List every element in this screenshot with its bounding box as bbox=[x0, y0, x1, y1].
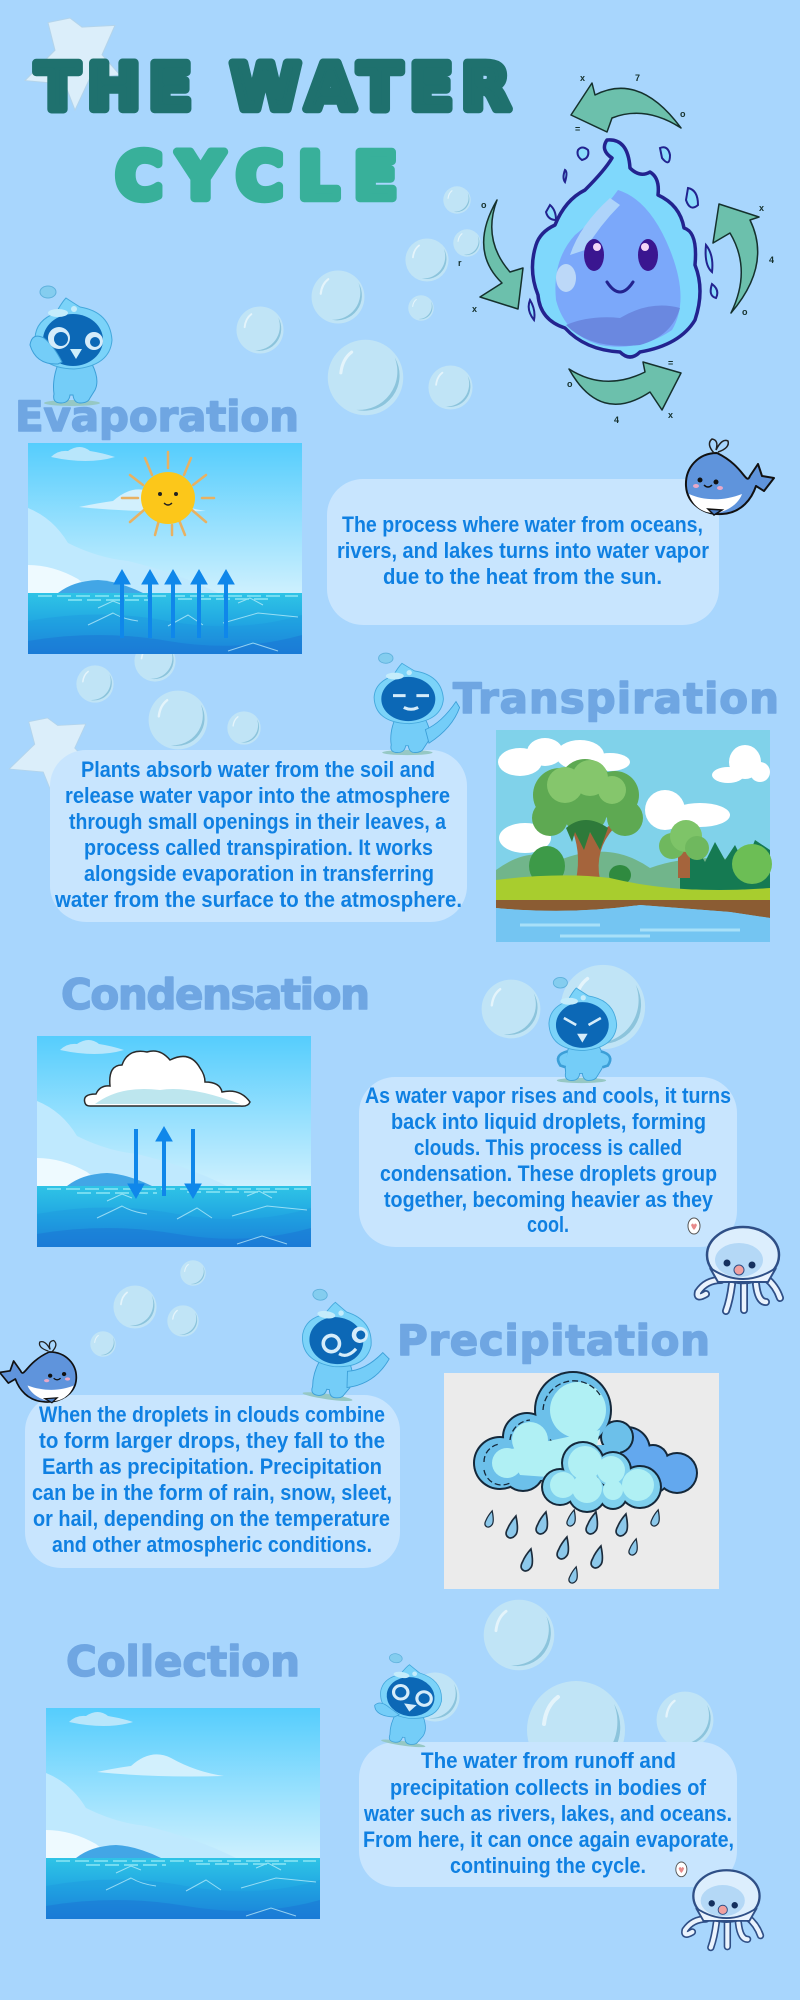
grass and bank bbox=[496, 875, 770, 905]
panel: collection text: From here, it can once again evaporate, bbox=[363, 1827, 734, 1852]
panel: evaporation text: due to the heat from the sun. bbox=[383, 564, 662, 589]
panel: transpiration text: through small openings in their leaves, a bbox=[69, 809, 447, 834]
panel: precipitation text: or hail, depending on the temperature bbox=[33, 1506, 390, 1531]
title line: the water: THE WATER bbox=[36, 51, 510, 124]
main cloud bbox=[473, 1371, 634, 1492]
smile bbox=[607, 282, 633, 292]
small marks around the drop: x bbox=[759, 203, 764, 213]
water drop body bbox=[529, 140, 717, 357]
panel: evaporation text: The process where water from oceans, bbox=[342, 512, 703, 537]
scene: evaporation bbox=[28, 443, 302, 654]
panel: transpiration text: water from the surface to the atmosphere. bbox=[54, 887, 462, 912]
panel: evaporation text bbox=[327, 479, 719, 625]
panel: evaporation text: rivers, and lakes turns into water vapor bbox=[337, 538, 709, 563]
small marks around the drop: x bbox=[668, 410, 673, 420]
evaporation arrows bbox=[114, 570, 234, 638]
heading: precipitation: Precipitation bbox=[397, 1316, 710, 1365]
panel: condensation text: clouds. This process is called bbox=[414, 1135, 682, 1160]
arrow: top bbox=[571, 83, 681, 132]
small marks around the drop: o bbox=[680, 109, 686, 119]
panel: condensation text: together, becoming heavier as they bbox=[384, 1187, 714, 1212]
star decoration: left bbox=[9, 718, 90, 793]
panel: transpiration text: process called transpiration. It works bbox=[84, 835, 433, 860]
raindrops bbox=[484, 1509, 662, 1584]
mascot: condensation bbox=[549, 977, 617, 1083]
panel: precipitation text bbox=[25, 1395, 400, 1568]
small marks around the drop: = bbox=[575, 124, 580, 134]
panel: collection text: water such as rivers, lakes, and oceans. bbox=[363, 1801, 732, 1826]
panel: transpiration text: release water vapor into the atmosphere bbox=[65, 783, 450, 808]
heading: evaporation: Evaporation bbox=[15, 392, 299, 441]
scene: tree landscape bbox=[496, 730, 772, 942]
title line: cycle: CYCLE bbox=[116, 140, 397, 213]
small marks around the drop: = bbox=[668, 358, 673, 368]
title bbox=[36, 51, 510, 213]
mascot: evaporation bbox=[30, 286, 112, 406]
eyes bbox=[584, 239, 658, 271]
heading: collection: Collection bbox=[66, 1637, 300, 1686]
arrow: bottom bbox=[569, 362, 681, 410]
panel: condensation text: cool. bbox=[527, 1212, 569, 1237]
panel: transpiration text: Plants absorb water from the soil and bbox=[81, 757, 435, 782]
panel: precipitation text: can be in the form of rain, snow, sleet, bbox=[32, 1480, 392, 1505]
small marks around the drop: 4 bbox=[614, 415, 619, 425]
bubbles: behind condensation mascot bbox=[482, 965, 645, 1049]
panel: precipitation text: When the droplets in clouds combine bbox=[39, 1402, 385, 1427]
panel: condensation text: condensation. These droplets group bbox=[380, 1161, 717, 1186]
panel: precipitation text: to form larger drops, they fall to the bbox=[39, 1428, 385, 1453]
panel: collection text bbox=[359, 1742, 737, 1887]
clouds bbox=[498, 738, 770, 853]
scene: condensation bbox=[37, 1036, 311, 1247]
panel: condensation text: back into liquid droplets, forming bbox=[391, 1109, 706, 1134]
icon: jellyfish lower bbox=[676, 1862, 760, 1948]
panel: precipitation text: Earth as precipitation. Precipitation bbox=[42, 1454, 382, 1479]
small marks around the drop: o bbox=[567, 379, 573, 389]
scene: collection bbox=[46, 1708, 320, 1919]
icon: whale right bbox=[686, 439, 774, 515]
small marks around the drop: 4 bbox=[769, 255, 774, 265]
cloud bbox=[84, 1051, 250, 1106]
mascot: transpiration bbox=[374, 653, 460, 755]
panel: collection text: The water from runoff and bbox=[421, 1748, 676, 1773]
back dark cloud bbox=[603, 1426, 698, 1494]
small marks around the drop: 7 bbox=[635, 73, 640, 83]
bubbles: collection bbox=[410, 1600, 713, 1779]
panel: condensation text bbox=[359, 1077, 737, 1247]
heading: transpiration: Transpiration bbox=[453, 674, 779, 723]
tree bbox=[570, 812, 614, 880]
small marks around the drop: o bbox=[742, 307, 748, 317]
small marks around the drop bbox=[458, 73, 774, 425]
bubbles: below evaporation bbox=[76, 640, 261, 749]
small marks around the drop: o bbox=[481, 200, 487, 210]
water drop character with cycle arrows bbox=[458, 73, 774, 425]
panel: transpiration text bbox=[50, 750, 467, 922]
panel: precipitation text: and other atmospheric conditions. bbox=[52, 1532, 372, 1557]
mascot: collection bbox=[370, 1652, 447, 1750]
icon: jellyfish upper bbox=[688, 1218, 780, 1311]
panel: transpiration text: alongside evaporation in transferring bbox=[84, 861, 434, 886]
mascot: precipitation bbox=[294, 1288, 397, 1407]
small marks around the drop: x bbox=[472, 304, 477, 314]
panel: collection text: continuing the cycle. bbox=[450, 1853, 646, 1878]
small marks around the drop: x bbox=[580, 73, 585, 83]
arrow: right bbox=[713, 204, 759, 313]
small marks around the drop: r bbox=[458, 258, 462, 268]
panel: condensation text: As water vapor rises and cools, it turns bbox=[365, 1083, 731, 1108]
star decoration: top bbox=[25, 18, 120, 110]
scene: rain cloud bbox=[444, 1371, 719, 1589]
icon: whale left bbox=[0, 1340, 76, 1403]
panel: collection text: precipitation collects in bodies of bbox=[390, 1775, 707, 1800]
bubbles: top group bbox=[236, 186, 481, 415]
heading: condensation: Condensation bbox=[61, 970, 370, 1019]
bubbles: below condensation bbox=[90, 1260, 206, 1357]
sun bbox=[122, 452, 214, 535]
arrow: left bbox=[480, 200, 523, 309]
front cloud bbox=[541, 1441, 662, 1513]
arrows bbox=[128, 1127, 201, 1198]
